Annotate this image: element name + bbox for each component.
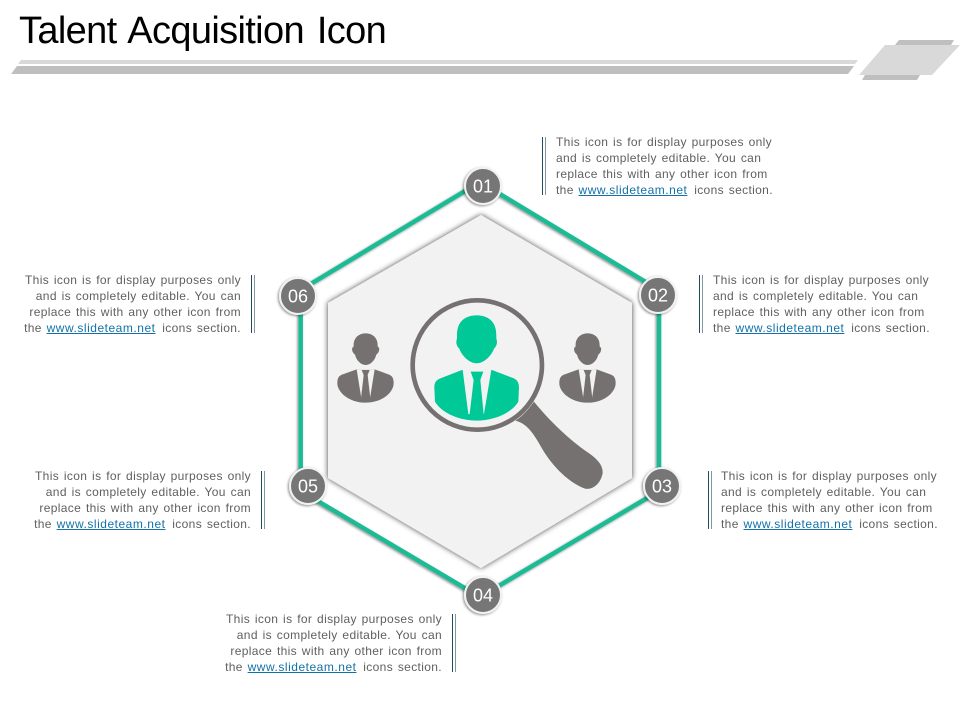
inner hexagon panel [328, 215, 632, 568]
text block 04: and is completely editable. You can [237, 628, 442, 642]
text block 04: This icon is for display purposes only [226, 612, 442, 626]
icon: talent search [337, 300, 616, 489]
title: Talent Acquisition Icon [19, 10, 386, 52]
icon: green person [434, 315, 519, 421]
divider 04 [452, 614, 456, 672]
text block 06 [24, 273, 241, 335]
text block 06: the www.slideteam.net icons section. [24, 321, 241, 335]
text block 01 [556, 135, 773, 197]
icon: left person [337, 333, 394, 403]
text block 04 [225, 612, 442, 674]
text block 02: and is completely editable. You can [713, 289, 918, 303]
divider 06 [251, 275, 255, 333]
node numbers: 01 [473, 176, 493, 196]
text block 03: the www.slideteam.net icons section. [721, 517, 938, 531]
icon: magnifier handle [515, 402, 603, 489]
text block 05: and is completely editable. You can [46, 485, 251, 499]
text block 01: This icon is for display purposes only [556, 135, 772, 149]
text block 06: and is completely editable. You can [36, 289, 241, 303]
node numbers: 02 [648, 286, 668, 306]
text block 05: the www.slideteam.net icons section. [34, 517, 251, 531]
node numbers: 05 [298, 476, 318, 496]
header rule [11, 40, 960, 80]
text block 02: This icon is for display purposes only [713, 273, 929, 287]
divider 02 [699, 275, 703, 333]
text block 03: and is completely editable. You can [721, 485, 926, 499]
text block 06: replace this with any other icon from [29, 305, 241, 319]
node numbers: 06 [288, 286, 308, 306]
icon: magnifier lens [413, 300, 542, 430]
text block 05: replace this with any other icon from [39, 501, 251, 515]
text block 03: replace this with any other icon from [721, 501, 933, 515]
node numbers: 04 [473, 586, 493, 606]
text block 04: replace this with any other icon from [230, 644, 442, 658]
icon: right person [559, 333, 616, 403]
text block 03 [721, 469, 938, 531]
green hexagon outline [301, 182, 659, 597]
node numbers: 03 [652, 476, 672, 496]
nodes [280, 168, 680, 613]
text block 02: replace this with any other icon from [713, 305, 925, 319]
text block 04: the www.slideteam.net icons section. [225, 660, 442, 674]
text block 06: This icon is for display purposes only [25, 273, 241, 287]
divider 01 [542, 137, 546, 195]
text block 02 [713, 273, 930, 335]
text block 01: and is completely editable. You can [556, 151, 761, 165]
node numbers [288, 176, 672, 606]
divider 05 [261, 471, 265, 529]
text block 02: the www.slideteam.net icons section. [713, 321, 930, 335]
text block 05 [34, 469, 251, 531]
text block 05: This icon is for display purposes only [35, 469, 251, 483]
text block 01: replace this with any other icon from [556, 167, 768, 181]
text block 01: the www.slideteam.net icons section. [556, 183, 773, 197]
text block 03: This icon is for display purposes only [721, 469, 937, 483]
divider 03 [708, 471, 712, 529]
